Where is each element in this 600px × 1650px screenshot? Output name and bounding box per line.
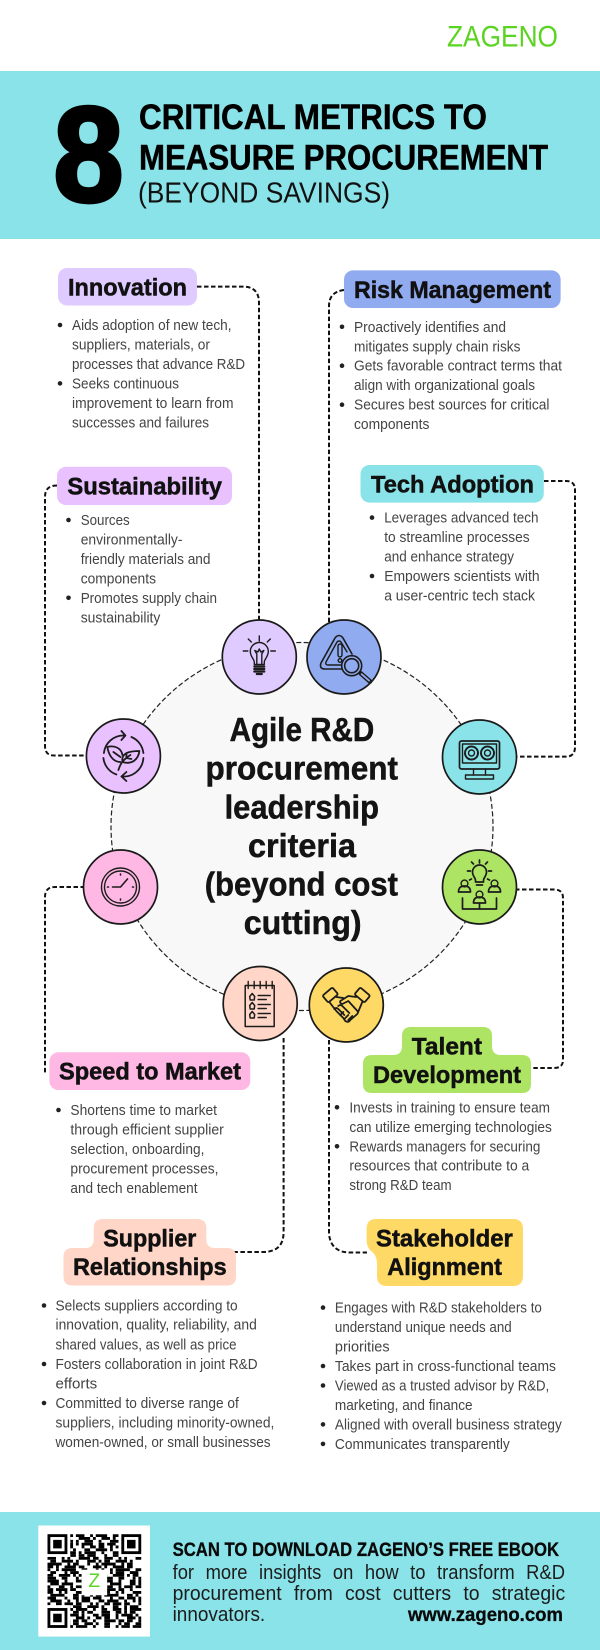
bullet list: sustainability: environmentally-	[81, 532, 183, 548]
bullet list: supplier relationships: shared values, as well as price	[56, 1337, 236, 1353]
panel: speed to market	[49, 1052, 250, 1197]
bullet list: risk management: align with organizational goals	[354, 378, 535, 394]
panel: risk management	[340, 270, 562, 433]
bullet list: innovation: improvement to learn from	[72, 396, 234, 412]
bullet list: stakeholder alignment: priorities	[335, 1340, 390, 1356]
bullet list: stakeholder alignment: Viewed as a trusted advisor by R&D,	[335, 1378, 549, 1394]
bullet list: speed to market	[56, 1103, 224, 1197]
bullet list: risk management: Secures best sources for critical	[354, 398, 550, 414]
panel: sustainability	[57, 467, 232, 626]
connector: tech adoption	[515, 481, 575, 757]
bullet list: supplier relationships: innovation, quality, reliability, and	[56, 1318, 257, 1334]
footer text: www.zageno.com	[407, 1604, 563, 1626]
center text	[205, 711, 398, 941]
connector: stakeholder alignment	[329, 1040, 367, 1252]
bullet list: speed to market: selection, onboarding,	[70, 1142, 204, 1158]
icon: lightbulb (innovation)	[222, 620, 296, 694]
icon: monitor with gears (tech adoption)	[442, 720, 516, 794]
bullet list: innovation: processes that advance R&D	[72, 357, 245, 373]
bullet list: supplier relationships: Selects suppliers according to	[56, 1298, 238, 1314]
connector: supplier relationships	[234, 1038, 284, 1252]
bullet list: tech adoption	[370, 511, 540, 604]
bullet list: tech adoption: to streamline processes	[384, 530, 530, 546]
icon: recycling leaves (sustainability)	[86, 719, 160, 793]
connector: innovation	[197, 287, 259, 622]
heading: innovation: Innovation	[68, 275, 187, 302]
bullet list: supplier relationships: women-owned, or small businesses	[55, 1435, 271, 1451]
bullet list: innovation: Aids adoption of new tech,	[72, 318, 232, 334]
bullet list: sustainability: sustainability	[81, 610, 161, 626]
bullet list: sustainability: friendly materials and	[81, 552, 210, 568]
icon: handshake (stakeholder alignment)	[309, 968, 383, 1042]
heading: risk management	[344, 270, 561, 308]
bullet list: tech adoption: Leverages advanced tech	[384, 511, 538, 527]
bullet list: supplier relationships: Committed to diverse range of	[56, 1396, 240, 1412]
heading: stakeholder alignment: Stakeholder	[376, 1226, 513, 1253]
bullet list: innovation	[58, 318, 245, 431]
bullet list: talent development: Invests in training to ensure team	[349, 1100, 550, 1116]
footer text: for more insights on how to transform R&D	[173, 1562, 565, 1584]
bullet list: risk management: components	[354, 417, 429, 433]
center text: (beyond cost	[205, 866, 398, 902]
heading: tech adoption: Tech Adoption	[371, 472, 534, 498]
bullet list: sustainability	[66, 513, 217, 626]
bullet list: sustainability: components	[81, 571, 156, 587]
bullet list: risk management	[340, 320, 562, 433]
heading: supplier relationships: Supplier	[103, 1226, 197, 1253]
bullet list: speed to market: procurement processes,	[70, 1162, 219, 1178]
header band	[0, 71, 600, 239]
center text: procurement	[206, 750, 398, 787]
bullet list: speed to market: through efficient supplier	[70, 1123, 224, 1139]
bullet list: sustainability: Sources	[81, 513, 130, 529]
icon: warning with magnifier (risk management)	[307, 620, 381, 694]
heading: speed to market: Speed to Market	[59, 1059, 241, 1086]
heading: stakeholder alignment: Alignment	[387, 1254, 502, 1281]
logo: ZAGENO: ZAGENO	[447, 20, 558, 54]
bullet list: innovation: suppliers, materials, or	[72, 338, 210, 354]
panel: tech adoption	[360, 465, 544, 604]
bullet list: tech adoption: a user-centric tech stack	[384, 588, 536, 604]
heading: innovation	[58, 268, 197, 306]
bullet list: talent development: Rewards managers for securing	[349, 1139, 540, 1155]
bullet list: talent development: can utilize emerging technologies	[349, 1120, 552, 1136]
center text: Agile R&D	[230, 711, 374, 748]
bullet list: tech adoption: and enhance strategy	[384, 550, 515, 566]
bullet list: stakeholder alignment: Engages with R&D stakeholders to	[335, 1301, 542, 1317]
center text: cutting)	[244, 904, 362, 941]
footer text	[173, 1539, 565, 1626]
bullet list: supplier relationships: Fosters collaboration in joint R&D	[56, 1357, 258, 1373]
bullet list: risk management: mitigates supply chain risks	[354, 339, 520, 355]
bullet list: sustainability: Promotes supply chain	[81, 591, 217, 607]
center text: leadership	[225, 788, 379, 825]
footer text: innovators.	[173, 1604, 265, 1626]
heading: supplier relationships: Relationships	[73, 1254, 227, 1281]
bullet list: stakeholder alignment	[321, 1301, 562, 1453]
heading: risk management: Risk Management	[354, 277, 551, 304]
title: MEASURE PROCUREMENT	[139, 137, 548, 177]
big number 8: 8	[54, 79, 124, 230]
bullet list: stakeholder alignment: Aligned with overall business strategy	[335, 1417, 562, 1433]
panel: stakeholder alignment	[321, 1219, 562, 1453]
icon: clock (speed to market)	[84, 850, 158, 924]
panel: innovation	[58, 268, 245, 431]
heading: talent development: Talent	[412, 1033, 482, 1060]
icon: checklist notepad (supplier relationships)	[223, 966, 297, 1040]
title: (BEYOND SAVINGS)	[138, 177, 390, 209]
connector: risk management	[329, 290, 344, 625]
central circle	[111, 642, 493, 1010]
bullet list: talent development: strong R&D team	[349, 1178, 452, 1194]
bullet list: stakeholder alignment: marketing, and finance	[335, 1398, 473, 1414]
connector: speed to market	[45, 887, 85, 1073]
heading: speed to market	[49, 1052, 250, 1090]
bullet list: talent development: resources that contribute to a	[349, 1159, 530, 1175]
heading: sustainability	[57, 467, 232, 505]
bullet list: innovation: successes and failures	[72, 415, 209, 431]
bullet list: risk management: Proactively identifies and	[354, 320, 506, 336]
bullet list: innovation: Seeks continuous	[72, 376, 179, 392]
QR code	[38, 1526, 150, 1637]
bullet list: speed to market: Shortens time to market	[70, 1103, 217, 1119]
title: CRITICAL METRICS TO	[139, 97, 487, 137]
icon: team with lightbulb (talent development)	[442, 850, 516, 924]
bullet list: stakeholder alignment: Takes part in cross-functional teams	[335, 1359, 556, 1375]
footer text: procurement from cost cutters to strategic	[173, 1583, 565, 1605]
heading: supplier relationships	[64, 1219, 236, 1286]
bullet list: supplier relationships	[42, 1298, 274, 1451]
bullet list: risk management: Gets favorable contract terms that	[354, 359, 562, 375]
heading: talent development: Development	[373, 1062, 521, 1089]
bullet list: supplier relationships: efforts	[56, 1376, 97, 1392]
center text: criteria	[248, 827, 357, 864]
bullet list: talent development	[335, 1100, 552, 1194]
QR code: Z	[88, 1571, 100, 1592]
connector: talent development	[515, 890, 563, 1068]
panel: supplier relationships	[42, 1219, 274, 1451]
connector: sustainability	[45, 486, 88, 756]
heading: stakeholder alignment	[367, 1219, 523, 1286]
panel: talent development	[335, 1027, 552, 1194]
heading: sustainability: Sustainability	[67, 474, 222, 501]
footer band	[0, 1512, 600, 1650]
bullet list: stakeholder alignment: Communicates transparently	[335, 1437, 510, 1453]
heading: tech adoption	[360, 465, 544, 503]
heading: talent development	[363, 1027, 531, 1093]
bullet list: tech adoption: Empowers scientists with	[384, 569, 540, 585]
bullet list: supplier relationships: suppliers, including minority-owned,	[56, 1415, 274, 1431]
bullet list: stakeholder alignment: understand unique needs and	[335, 1320, 512, 1336]
bullet list: speed to market: and tech enablement	[70, 1181, 198, 1197]
title	[138, 97, 548, 209]
